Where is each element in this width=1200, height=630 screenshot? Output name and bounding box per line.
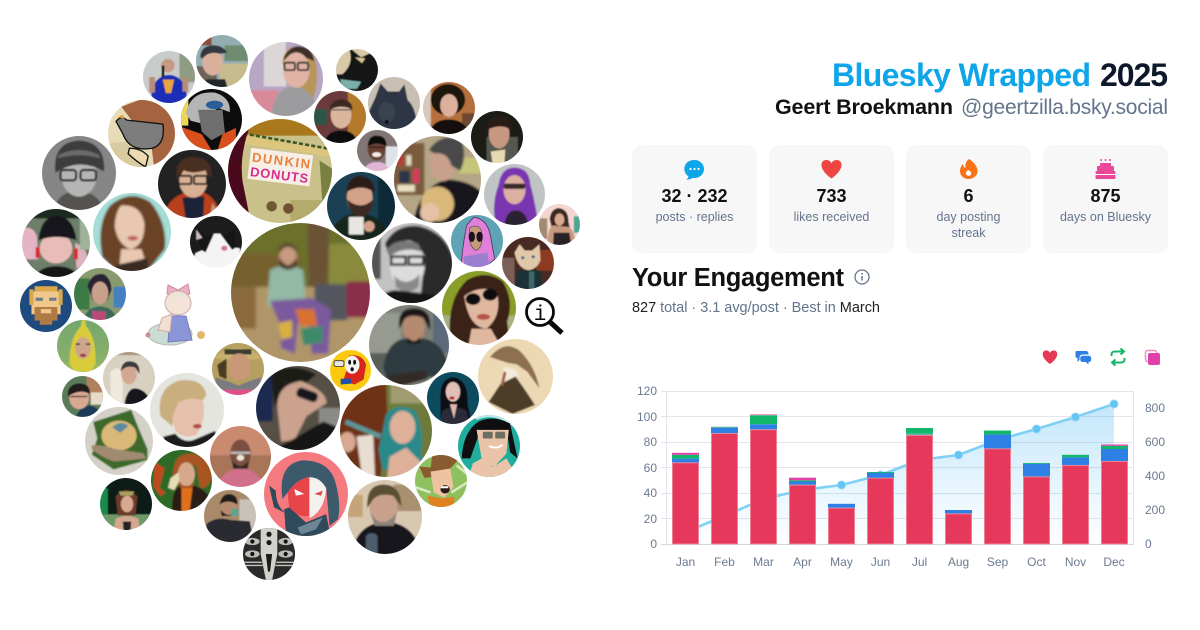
subtitle: user name and handle xyxy=(775,95,1168,119)
avatar bubble cluster xyxy=(8,25,588,590)
bars: reposts xyxy=(672,415,1128,482)
avatar: hen illustration xyxy=(108,100,175,167)
avatar: cartoon man Kronk with sunglasses xyxy=(458,415,520,477)
icon: magnifying glass with i: i xyxy=(534,304,546,327)
avatar: blonde woman with glasses xyxy=(249,42,323,116)
left axis labels: 80 xyxy=(644,435,657,449)
avatar: man with grey beanie xyxy=(42,136,116,210)
avatar: man in blue shirt xyxy=(143,51,195,103)
icon: info circle xyxy=(855,270,869,284)
panel: days on Bluesky stat xyxy=(1043,145,1168,253)
stat value: 733: 733 xyxy=(816,186,847,206)
bars: quotes xyxy=(672,414,1128,480)
subtitle: user name and handle: @geertzilla.bsky.social xyxy=(961,96,1168,119)
sign: Dunkin Donuts: DONUTS xyxy=(249,164,309,186)
avatar: purple haired woman xyxy=(484,164,545,225)
avatar: cartoon cowboy face xyxy=(415,455,467,507)
avatar: person in banana costume xyxy=(57,320,109,372)
avatar: red haired man with telephone xyxy=(151,450,212,511)
left axis labels xyxy=(637,384,657,551)
avatar: red masked Shy Guy character xyxy=(330,350,371,391)
avatar: beige bird illustration xyxy=(478,339,553,414)
left axis labels: 20 xyxy=(644,512,657,526)
chart grid xyxy=(661,391,1134,544)
stat label: days on Bluesky: days on Bluesky xyxy=(1060,210,1152,224)
title: Bluesky Wrapped 2025: Bluesky Wrapped xyxy=(832,57,1091,93)
avatar: main man sitting in the woods, largest circle xyxy=(231,223,370,362)
avatar: man in leather jacket on stairs xyxy=(369,305,449,385)
area under cumulative line xyxy=(686,404,1114,544)
avatar: comic character with goggles xyxy=(181,89,242,150)
icon: heart legend xyxy=(1043,350,1057,364)
month labels: Jul xyxy=(912,555,927,569)
avatar: black and white eyes pattern xyxy=(243,528,295,580)
stat label: day posting streak xyxy=(937,210,1001,240)
stat value: 875: 875 xyxy=(1090,186,1121,206)
avatar: woman with sunglasses on green xyxy=(442,271,516,345)
avatar: woman with crown in green xyxy=(100,478,152,530)
avatar: small man with glasses xyxy=(62,376,103,417)
month labels: Feb xyxy=(714,555,735,569)
avatar: woman in dark outfit xyxy=(539,204,580,245)
avatar: woman with teal hair and horse xyxy=(340,385,432,477)
panel: likes stat xyxy=(769,145,894,253)
month labels: Apr xyxy=(793,555,812,569)
avatar: black wolf dog xyxy=(368,77,420,129)
right axis labels: 800 xyxy=(1145,401,1165,415)
month labels: Oct xyxy=(1027,555,1046,569)
cumulative line xyxy=(686,400,1118,532)
right axis labels: 0 xyxy=(1145,537,1152,551)
stat value: 32 · 232: 32 · 232 xyxy=(661,186,728,206)
left axis labels: 0 xyxy=(650,537,657,551)
avatar: woman with glasses and red scarf xyxy=(158,150,226,218)
subtitle: user name and handle: Geert Broekmann xyxy=(775,95,953,119)
month labels xyxy=(676,555,1125,569)
avatar: man in pink shirt looking up xyxy=(210,426,271,487)
icon: birthday cake xyxy=(1096,159,1116,179)
avatar: woman looking up wearing sunglasses xyxy=(256,366,340,450)
month labels: Nov xyxy=(1065,555,1086,569)
avatar: man in dark room xyxy=(471,111,523,163)
stat label: day posting streak: streak xyxy=(951,226,986,240)
left axis labels: 40 xyxy=(644,486,657,500)
avatar: dark haired woman on teal xyxy=(427,372,479,424)
stat label: likes received: likes received xyxy=(794,210,869,224)
stat label: posts · replies: posts · replies xyxy=(656,210,733,224)
month labels: Dec xyxy=(1103,555,1125,569)
heading: Your Engagement: Your Engagement xyxy=(632,264,844,292)
avatar: pink hooded character illustration xyxy=(451,215,503,267)
avatar: man drinking coffee xyxy=(204,490,256,542)
icon: reposts legend xyxy=(1112,348,1124,366)
right axis labels: 600 xyxy=(1145,435,1165,449)
month labels: Jun xyxy=(871,555,890,569)
icon: heart xyxy=(821,160,842,178)
month labels: Sep xyxy=(987,555,1008,569)
icon: replies legend xyxy=(1075,351,1091,364)
avatar: woman in black hat on pink chair xyxy=(22,209,90,277)
avatar: man holding white mug xyxy=(327,172,395,240)
avatar: man by stone arches xyxy=(103,352,155,404)
avatar: cartoon girl with pink bow, no background xyxy=(146,284,205,345)
sign: Dunkin Donuts: DUNKIN xyxy=(251,150,311,172)
stat label: day posting streak: day posting xyxy=(937,210,1001,224)
avatar: curly haired woman xyxy=(423,82,475,134)
sign: Dunkin Donuts xyxy=(247,148,313,186)
avatar: man in straw hat and scarf xyxy=(212,343,264,395)
icon: speech bubble xyxy=(684,160,704,180)
avatar: black and white cat xyxy=(190,216,242,268)
month labels: Jan xyxy=(676,555,695,569)
engagement summary text: 827 total · 3.1 avg/post · Best in March xyxy=(632,300,880,316)
avatar: large Dunkin Donuts photo xyxy=(228,119,332,223)
avatar: woman with short blonde hair xyxy=(150,373,224,447)
right axis labels: 400 xyxy=(1145,469,1165,483)
bars: replies xyxy=(672,424,1128,513)
title: Bluesky Wrapped 2025: 2025 xyxy=(1100,57,1168,93)
avatar: dark ink drawing xyxy=(336,49,378,91)
avatar: man with glasses and bright background xyxy=(314,91,366,143)
combo chart: monthly engagement bars with cumulative line xyxy=(637,384,1165,569)
avatar: woman with long brown hair xyxy=(93,193,171,271)
left axis labels: 120 xyxy=(637,384,657,398)
chart legend icons xyxy=(1043,348,1160,366)
icon: flame xyxy=(960,159,978,179)
avatar: pixel art bearded man xyxy=(20,280,72,332)
avatar: man with beard and microphone xyxy=(348,480,422,554)
right axis labels: 200 xyxy=(1145,503,1165,517)
panel: posts and replies stat xyxy=(632,145,757,253)
avatar: smiling man with glasses xyxy=(357,130,398,171)
left axis labels: 60 xyxy=(644,461,657,475)
avatar: fox plush character xyxy=(502,237,554,289)
avatar: woman with glasses against garden xyxy=(74,268,126,320)
month labels: Mar xyxy=(753,555,774,569)
month labels: Aug xyxy=(948,555,969,569)
month labels: May xyxy=(830,555,853,569)
avatar: man in cap xyxy=(196,35,248,87)
left axis labels: 100 xyxy=(637,410,657,424)
avatar: black and white man with glasses xyxy=(372,223,452,303)
icon: quotes legend xyxy=(1146,350,1160,365)
bars: likes xyxy=(672,430,1128,544)
icon: magnifying glass with i xyxy=(526,298,562,333)
panel: day posting streak stat xyxy=(906,145,1031,253)
stat value: 6: 6 xyxy=(963,186,974,206)
avatar: illustrated woman in red and white mask xyxy=(264,452,348,536)
right axis labels xyxy=(1145,401,1165,551)
avatar: man with child and bookshelf xyxy=(394,136,481,223)
avatar: hand holding green bird pouch xyxy=(85,407,153,475)
